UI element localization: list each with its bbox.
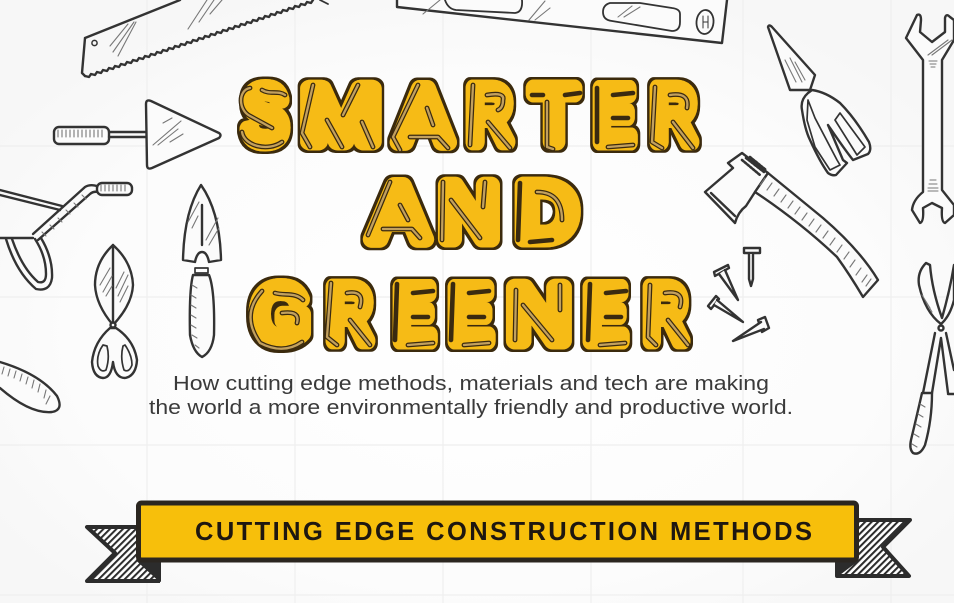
title: SMARTER AND GREENER [244, 71, 696, 358]
icon: tin snips [768, 26, 870, 175]
banner heading: CUTTING EDGE CONSTRUCTION METHODS [195, 518, 812, 546]
subtitle [149, 373, 793, 419]
icon: handle bottom left [0, 362, 60, 412]
title: SMARTER AND GREENER: N [440, 168, 498, 256]
title: SMARTER AND GREENER: A [398, 71, 449, 159]
title inline highlights [241, 85, 693, 349]
title: SMARTER AND GREENER: E [449, 270, 492, 358]
title: SMARTER AND GREENER: R [651, 71, 696, 159]
title: SMARTER AND GREENER: M [303, 71, 379, 159]
icon: axe [705, 153, 878, 297]
icon: pointing trowel [54, 100, 220, 169]
subtitle: How cutting edge methods, materials and tech are making [173, 373, 769, 395]
icon: hand saw [82, 0, 328, 77]
title: SMARTER AND GREENER: R [644, 270, 687, 358]
icon: spirit level [397, 0, 727, 43]
title: SMARTER AND GREENER: R [327, 270, 372, 358]
title: SMARTER AND GREENER: G [253, 270, 308, 358]
subtitle: the world a more environmentally friendly and productive world. [149, 397, 793, 419]
icon: nails [708, 248, 769, 341]
icon: wheelbarrow [0, 183, 132, 290]
title: SMARTER AND GREENER: D [517, 168, 576, 256]
icon: garden trowel [183, 185, 221, 357]
title: SMARTER AND GREENER: E [594, 71, 634, 159]
title: SMARTER AND GREENER: N [508, 270, 570, 358]
title: SMARTER AND GREENER: A [372, 168, 426, 256]
title: SMARTER AND GREENER: E [394, 270, 434, 358]
banner: cutting edge construction methods [87, 503, 910, 581]
ribbon tail right [837, 520, 910, 576]
icon: wrench [906, 15, 954, 223]
title: SMARTER AND GREENER: E [584, 270, 626, 358]
icon: small shears [92, 245, 137, 378]
banner panel [138, 503, 856, 560]
title: SMARTER AND GREENER: S [244, 71, 286, 159]
icon: long pliers [910, 263, 954, 454]
title: SMARTER AND GREENER: T [532, 71, 576, 159]
title: SMARTER AND GREENER: R [467, 71, 512, 159]
ribbon tail left [87, 527, 160, 581]
